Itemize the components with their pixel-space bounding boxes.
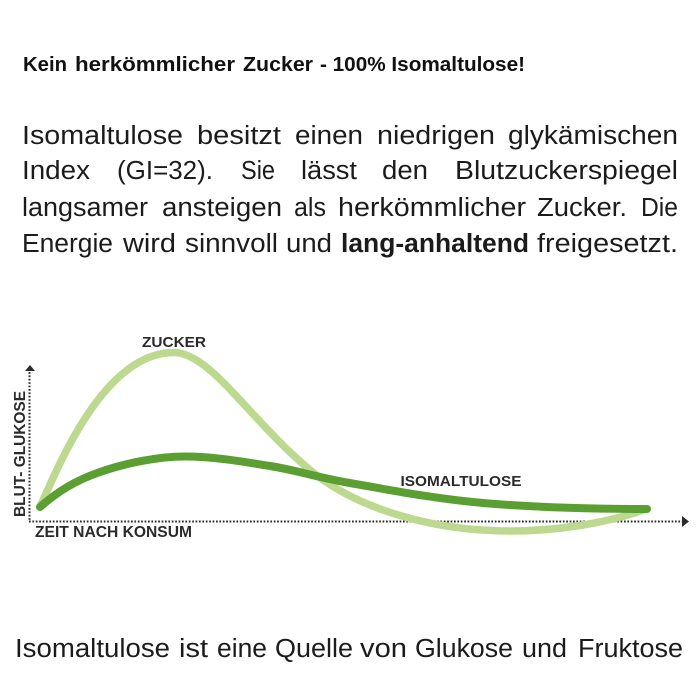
label: Blut-Glukose: BLUT- GLUKOSE xyxy=(12,391,29,517)
footer text: eine xyxy=(217,635,267,663)
footer text xyxy=(15,635,683,663)
chart: blood glucose over time xyxy=(12,334,689,541)
label: Zucker: ZUCKER xyxy=(142,334,206,351)
text block: description: niedrigen xyxy=(377,122,495,150)
text block: description: (GI=32). xyxy=(117,157,213,185)
curve: Zucker xyxy=(40,352,643,531)
footer text: ist xyxy=(179,635,208,663)
footer text: Quelle xyxy=(275,635,353,663)
text block: description: wird xyxy=(122,230,176,258)
footer text: Glukose xyxy=(415,635,513,663)
text block: description: Energie xyxy=(22,230,113,258)
text block: description xyxy=(22,122,678,258)
footer text: Fruktose xyxy=(578,635,683,663)
text block: description: lang-anhaltend xyxy=(341,230,529,258)
text block: description: ansteigen xyxy=(162,194,282,222)
text block: description: Blutzuckerspiegel xyxy=(455,157,678,185)
text block: description: Zucker. xyxy=(537,194,627,222)
title: herkömmlicher xyxy=(75,54,235,76)
text block: description: einen xyxy=(295,122,363,150)
text block: description: Sie xyxy=(241,157,275,185)
text block: description: Die xyxy=(641,194,678,222)
footer text: von xyxy=(360,635,407,663)
text block: description: herkömmlicher xyxy=(338,194,527,222)
text block: description: und xyxy=(286,230,332,258)
label: Zeit nach Konsum: ZEIT NACH KONSUM xyxy=(35,524,192,541)
footer text: Isomaltulose xyxy=(15,635,170,663)
text block: description: lässt xyxy=(301,157,357,185)
text block: description: langsamer xyxy=(22,194,149,222)
text block: description: den xyxy=(382,157,428,185)
text block: description: glykämischen xyxy=(508,122,678,150)
text block: description: als xyxy=(294,194,326,222)
title: - 100% Isomaltulose! xyxy=(320,54,525,76)
text block: description: sinnvoll xyxy=(185,230,278,258)
x axis arrow xyxy=(29,516,689,527)
text block: description: freigesetzt. xyxy=(537,230,678,258)
label: Isomaltulose: ISOMALTULOSE xyxy=(400,473,522,490)
text block: description: Index xyxy=(22,157,90,185)
title: Kein xyxy=(23,54,67,76)
title xyxy=(23,54,525,76)
text block: description: besitzt xyxy=(197,122,281,150)
text block: description: Isomaltulose xyxy=(22,122,183,150)
title: Zucker xyxy=(243,54,313,76)
footer text: und xyxy=(522,635,567,663)
y axis arrow xyxy=(25,365,35,521)
curve: Isomaltulose xyxy=(40,456,647,509)
